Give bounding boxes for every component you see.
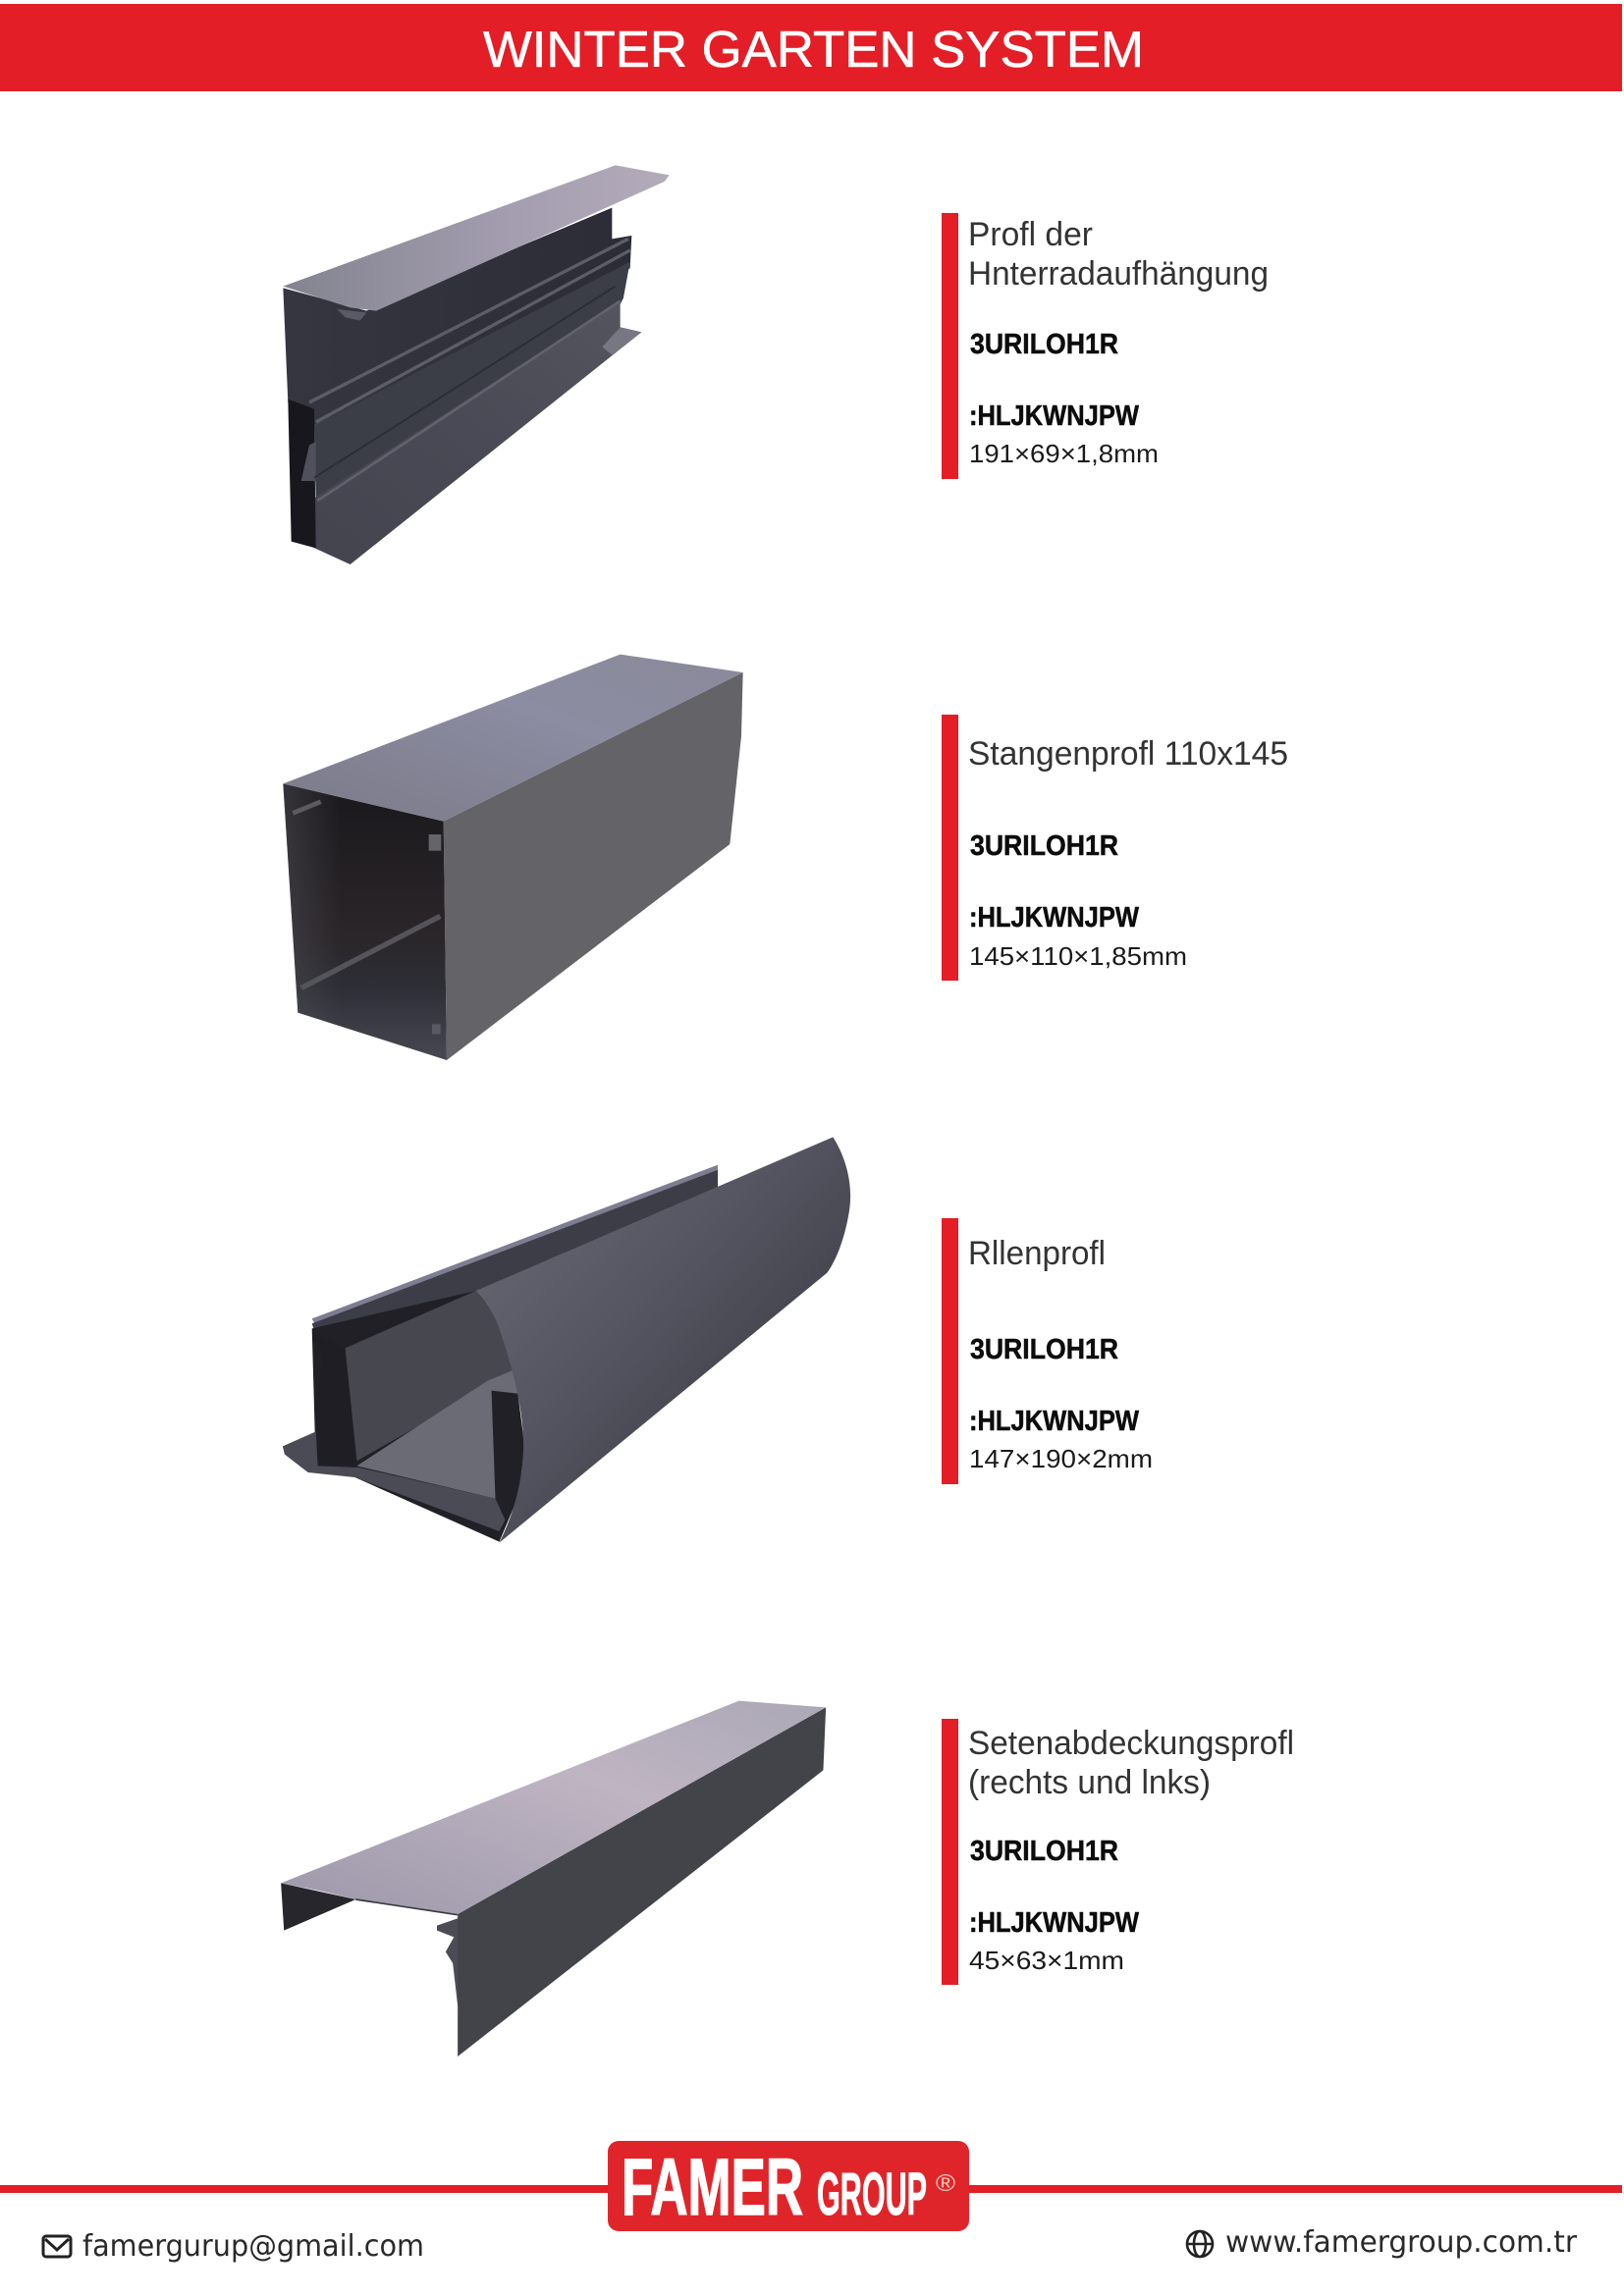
text block: gutter profile: 147×190×2mm (969, 1444, 1153, 1473)
logo: FAMER (622, 2143, 803, 2232)
text block: rear suspension profile: 3URILOH1R (970, 329, 1118, 360)
website contact: www.famergroup.com.tr (1225, 2225, 1578, 2260)
icon: globe (1187, 2231, 1213, 2257)
text block: rear suspension profile: :HLJKWNJPW (969, 400, 1140, 432)
icon: envelope (43, 2236, 71, 2257)
logo: ® (936, 2170, 955, 2197)
text block: post profile (942, 715, 1288, 981)
profile image: gutter profile (283, 1137, 850, 1543)
text block: rear suspension profile (942, 213, 1269, 479)
text block: side cover profile: (rechts und lnks) (968, 1764, 1211, 1801)
text block: rear suspension profile: Profl der (968, 216, 1093, 253)
text block: post profile: :HLJKWNJPW (969, 902, 1140, 934)
logo: GROUP (817, 2161, 927, 2227)
email contact: famergurup@gmail.com (82, 2229, 424, 2264)
text block: gutter profile: Rllenprofl (968, 1235, 1106, 1272)
text block: gutter profile (942, 1218, 1153, 1484)
text block: side cover profile: 3URILOH1R (970, 1836, 1118, 1867)
text block: gutter profile: 3URILOH1R (970, 1334, 1118, 1365)
text block: side cover profile: 45×63×1mm (969, 1946, 1124, 1975)
text block: post profile: 3URILOH1R (970, 830, 1118, 862)
text block: post profile: 145×110×1,85mm (969, 941, 1187, 971)
text block: side cover profile: :HLJKWNJPW (969, 1907, 1140, 1939)
text block: side cover profile: Setenabdeckungsprofl (968, 1725, 1294, 1762)
profile image: side cover profile (281, 1701, 826, 2056)
text block: rear suspension profile: Hnterradaufhängung (968, 255, 1269, 293)
text block: rear suspension profile: 191×69×1,8mm (969, 439, 1159, 468)
text block: post profile: Stangenprofl 110x145 (968, 735, 1288, 773)
title: WINTER GARTEN SYSTEM (483, 22, 1144, 79)
text block: gutter profile: :HLJKWNJPW (969, 1406, 1140, 1437)
profile image: post profile (283, 655, 743, 1060)
text block: side cover profile (942, 1719, 1294, 1985)
header bar (0, 4, 1622, 91)
footer rule (0, 2185, 1622, 2193)
profile image: rear suspension profile (283, 165, 670, 564)
